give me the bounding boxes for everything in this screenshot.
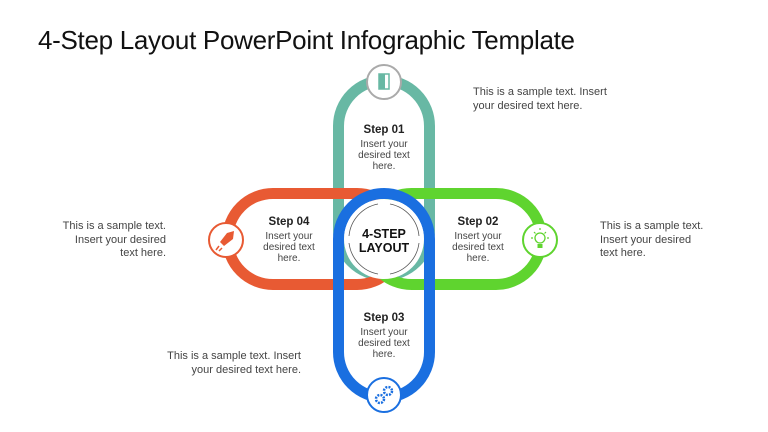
step 03 text: Insert your <box>360 327 408 338</box>
step 02 text: desired text <box>452 242 504 253</box>
icon: lightbulb <box>523 223 557 257</box>
side text left: text here. <box>120 247 166 259</box>
capsule: blue step 03 <box>338 194 430 398</box>
side text bottom left: your desired text here. <box>192 364 301 376</box>
step 02 text: Insert your <box>454 231 502 242</box>
step 01 text: Insert your <box>360 139 408 150</box>
step 04 text: Insert your <box>265 231 313 242</box>
step 02 text: here. <box>467 253 489 264</box>
side text right: Insert your desired <box>600 234 691 246</box>
step 02 text <box>452 216 504 264</box>
step 02 text: Step 02 <box>458 216 498 228</box>
icon: door <box>367 65 401 99</box>
step 04 text: here. <box>278 253 300 264</box>
step 03 text: Step 03 <box>364 312 404 324</box>
center circle <box>344 199 424 279</box>
title: 4-Step Layout PowerPoint Infographic Template <box>38 25 575 55</box>
step 03 text: desired text <box>358 338 410 349</box>
center circle: LAYOUT <box>359 241 409 255</box>
side text top right: This is a sample text. Insert <box>473 86 607 98</box>
side text left: Insert your desired <box>75 234 166 246</box>
side text left: This is a sample text. <box>63 220 166 232</box>
icon: gears <box>367 378 401 412</box>
side text right: text here. <box>600 247 646 259</box>
capsule: orange step 04 <box>228 194 402 284</box>
step 01 text: desired text <box>358 150 410 161</box>
step 03 text <box>358 312 410 360</box>
step 03 text: here. <box>373 349 395 360</box>
icon: rocket <box>209 223 243 257</box>
side text right <box>600 220 703 259</box>
step 01 text: here. <box>373 161 395 172</box>
side text bottom left: This is a sample text. Insert <box>167 350 301 362</box>
side text bottom left <box>167 350 301 376</box>
center circle: 4-STEP <box>362 227 406 241</box>
step 01 text: Step 01 <box>364 124 404 136</box>
side text left <box>62 220 166 259</box>
step 04 text <box>263 216 315 264</box>
side text top right <box>473 86 607 112</box>
capsule: green step 02 <box>366 194 542 284</box>
side text top right: your desired text here. <box>473 100 582 112</box>
step 01 text <box>358 124 410 172</box>
capsule: teal step 01 <box>338 80 430 276</box>
step 04 text: desired text <box>263 242 315 253</box>
side text right: This is a sample text. <box>600 220 703 232</box>
step 04 text: Step 04 <box>269 216 309 228</box>
